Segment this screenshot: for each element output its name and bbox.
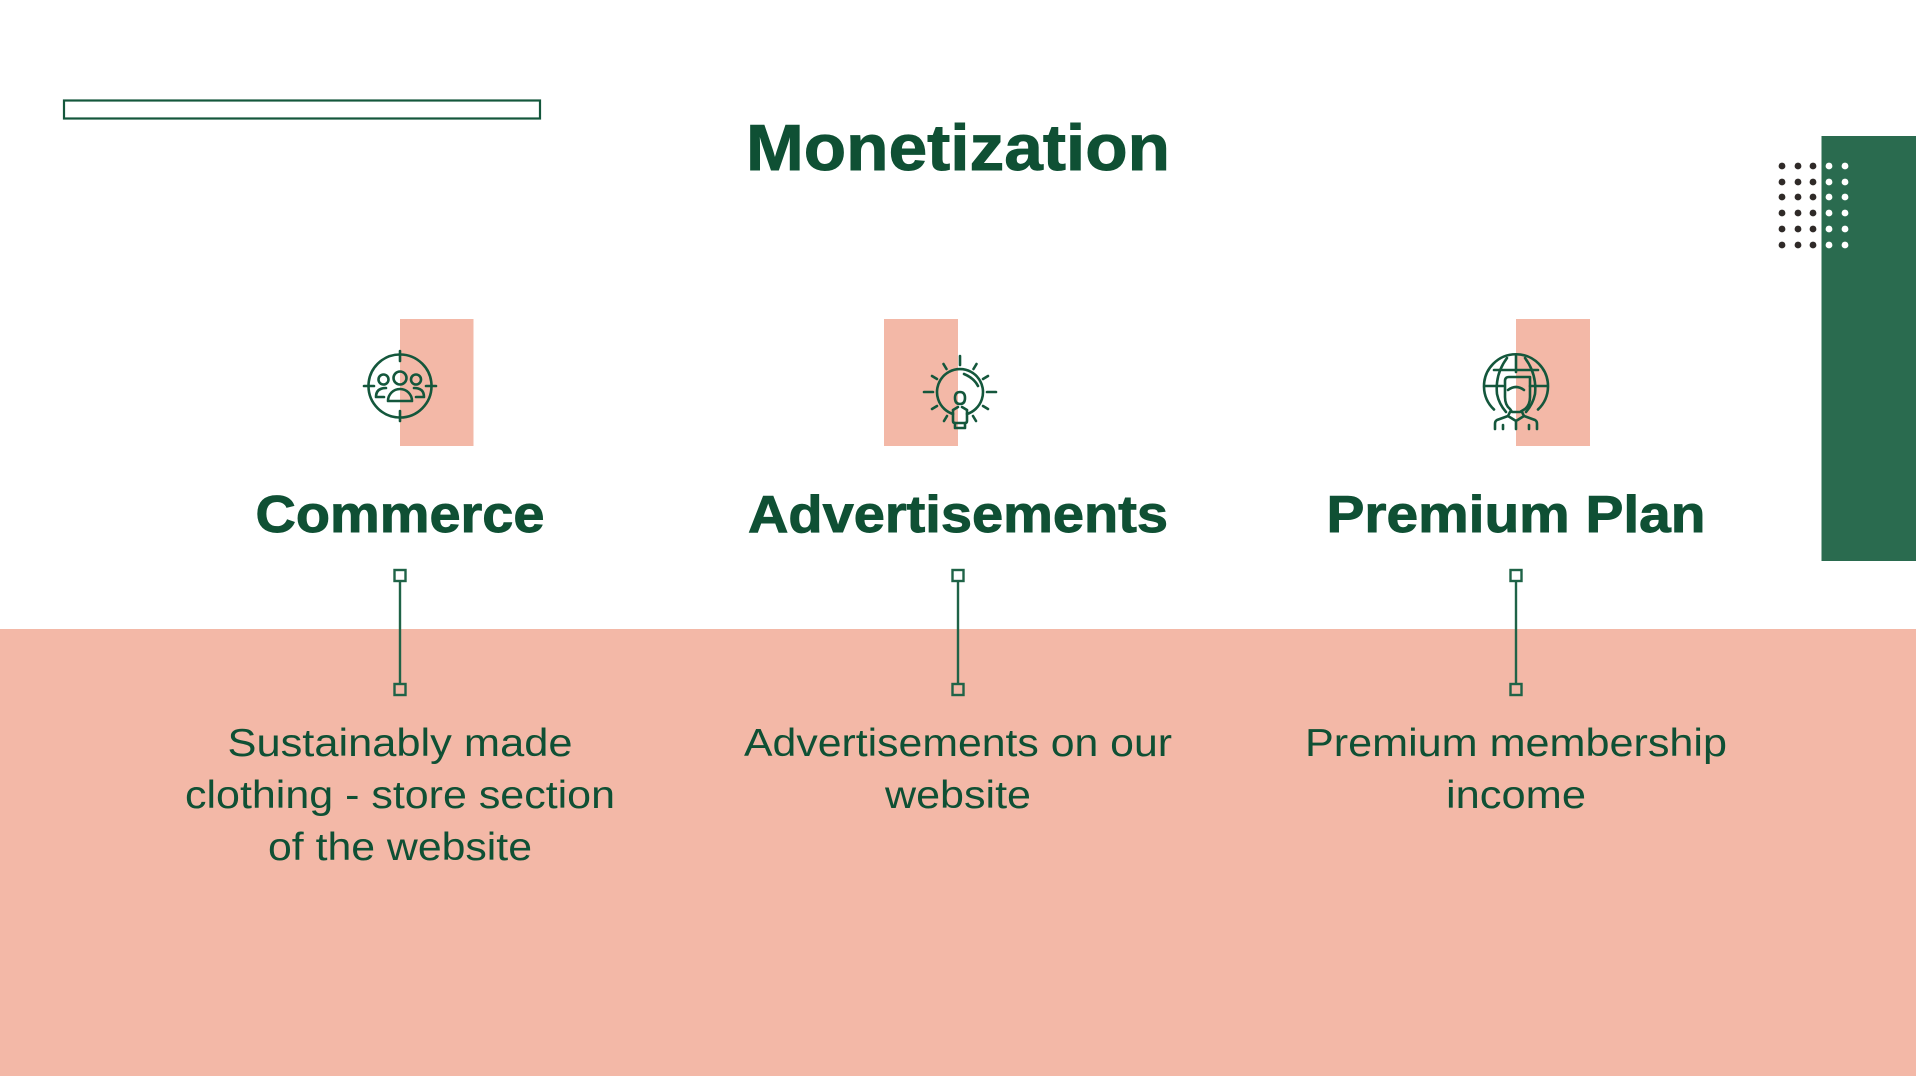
text: Commerce description xyxy=(185,722,615,869)
connector: Premium Plan xyxy=(1510,570,1522,695)
text: Advertisements description: Advertisements on our xyxy=(744,722,1172,765)
column: Advertisements xyxy=(744,319,1172,817)
dot grid xyxy=(1779,163,1848,248)
text: Commerce description: Sustainably made xyxy=(228,722,572,765)
title: Monetization xyxy=(746,111,1170,184)
column: Premium Plan xyxy=(1305,319,1727,817)
connector: Advertisements xyxy=(952,570,964,695)
icon: globe with person xyxy=(1484,354,1548,429)
green side panel xyxy=(1822,136,1916,561)
text: Premium Plan description: income xyxy=(1446,774,1586,817)
text: Premium Plan description xyxy=(1305,722,1727,817)
text: Advertisements description xyxy=(744,722,1172,817)
text: Premium Plan description: Premium membership xyxy=(1305,722,1727,765)
outlined title bar xyxy=(64,100,540,118)
text: Commerce description: of the website xyxy=(268,826,532,869)
pink block: Commerce xyxy=(400,319,474,446)
icon: target audience xyxy=(364,351,436,421)
pink bottom band xyxy=(0,629,1916,1076)
text: Commerce description: clothing - store section xyxy=(185,774,615,817)
text: Advertisements description: website xyxy=(884,774,1031,817)
pink block: Premium Plan xyxy=(1516,319,1590,446)
heading: Commerce: Commerce xyxy=(256,486,544,544)
connector: Commerce xyxy=(394,570,406,695)
column: Commerce xyxy=(185,319,615,869)
heading: Premium Plan: Premium Plan xyxy=(1326,486,1706,544)
heading: Advertisements: Advertisements xyxy=(748,486,1168,544)
icon: lightbulb with person xyxy=(924,356,996,428)
pink block: Advertisements xyxy=(884,319,958,446)
